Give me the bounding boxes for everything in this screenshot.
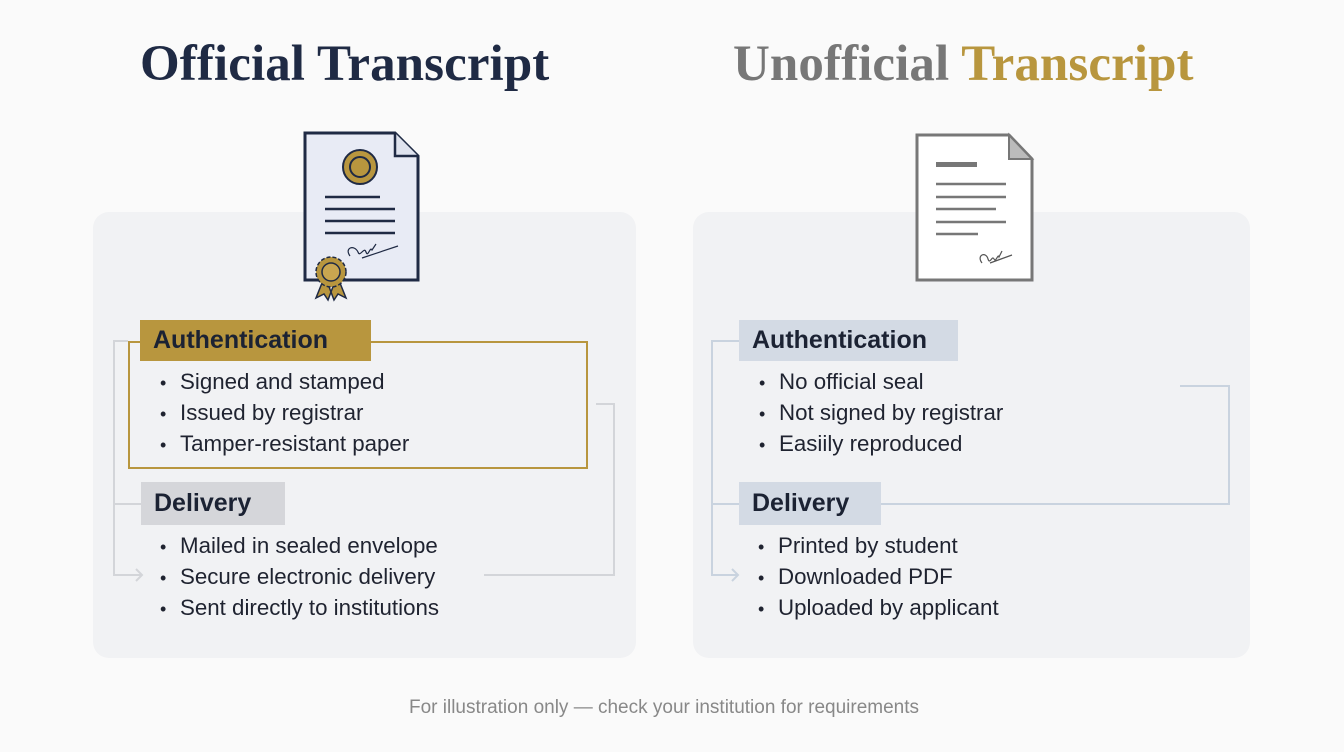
heading: unofficial authentication — [739, 320, 958, 361]
list: official delivery: Secure electronic delivery — [180, 564, 435, 589]
list: official delivery — [160, 533, 439, 620]
list: unofficial authentication: No official seal — [779, 369, 924, 394]
heading: official authentication — [140, 320, 371, 361]
list: official authentication: Signed and stamped — [180, 369, 385, 394]
list: official delivery: Sent directly to institutions — [180, 595, 439, 620]
list: official authentication: Issued by registrar — [180, 400, 363, 425]
panel: official — [93, 212, 636, 658]
footer note: For illustration only — check your institution for requirements — [409, 697, 919, 718]
list: unofficial delivery: Downloaded PDF — [778, 564, 953, 589]
list: official authentication — [160, 369, 409, 456]
heading: unofficial authentication: Authentication — [752, 326, 927, 354]
heading: official authentication: Authentication — [153, 326, 328, 354]
icon: official document with seal — [304, 132, 420, 302]
heading: unofficial delivery: Delivery — [752, 489, 849, 517]
title: unofficial: Unofficial Transcript — [733, 36, 1194, 92]
list: unofficial delivery — [758, 533, 999, 620]
box: official authentication outline — [128, 341, 588, 469]
list: unofficial authentication — [760, 369, 1003, 456]
list: unofficial authentication: Easiily reproduced — [779, 431, 962, 456]
heading: official delivery: Delivery — [154, 489, 251, 517]
heading: unofficial delivery — [739, 482, 881, 525]
list: unofficial delivery: Printed by student — [778, 533, 958, 558]
title: official: Official Transcript — [140, 36, 549, 92]
panel: unofficial — [693, 212, 1250, 658]
list: unofficial delivery: Uploaded by applicant — [778, 595, 999, 620]
list: official delivery: Mailed in sealed envelope — [180, 533, 438, 558]
icon: unofficial plain document — [916, 132, 1034, 282]
list: unofficial authentication: Not signed by registrar — [779, 400, 1003, 425]
list: official authentication: Tamper-resistant paper — [180, 431, 409, 456]
heading: official delivery — [141, 482, 285, 525]
